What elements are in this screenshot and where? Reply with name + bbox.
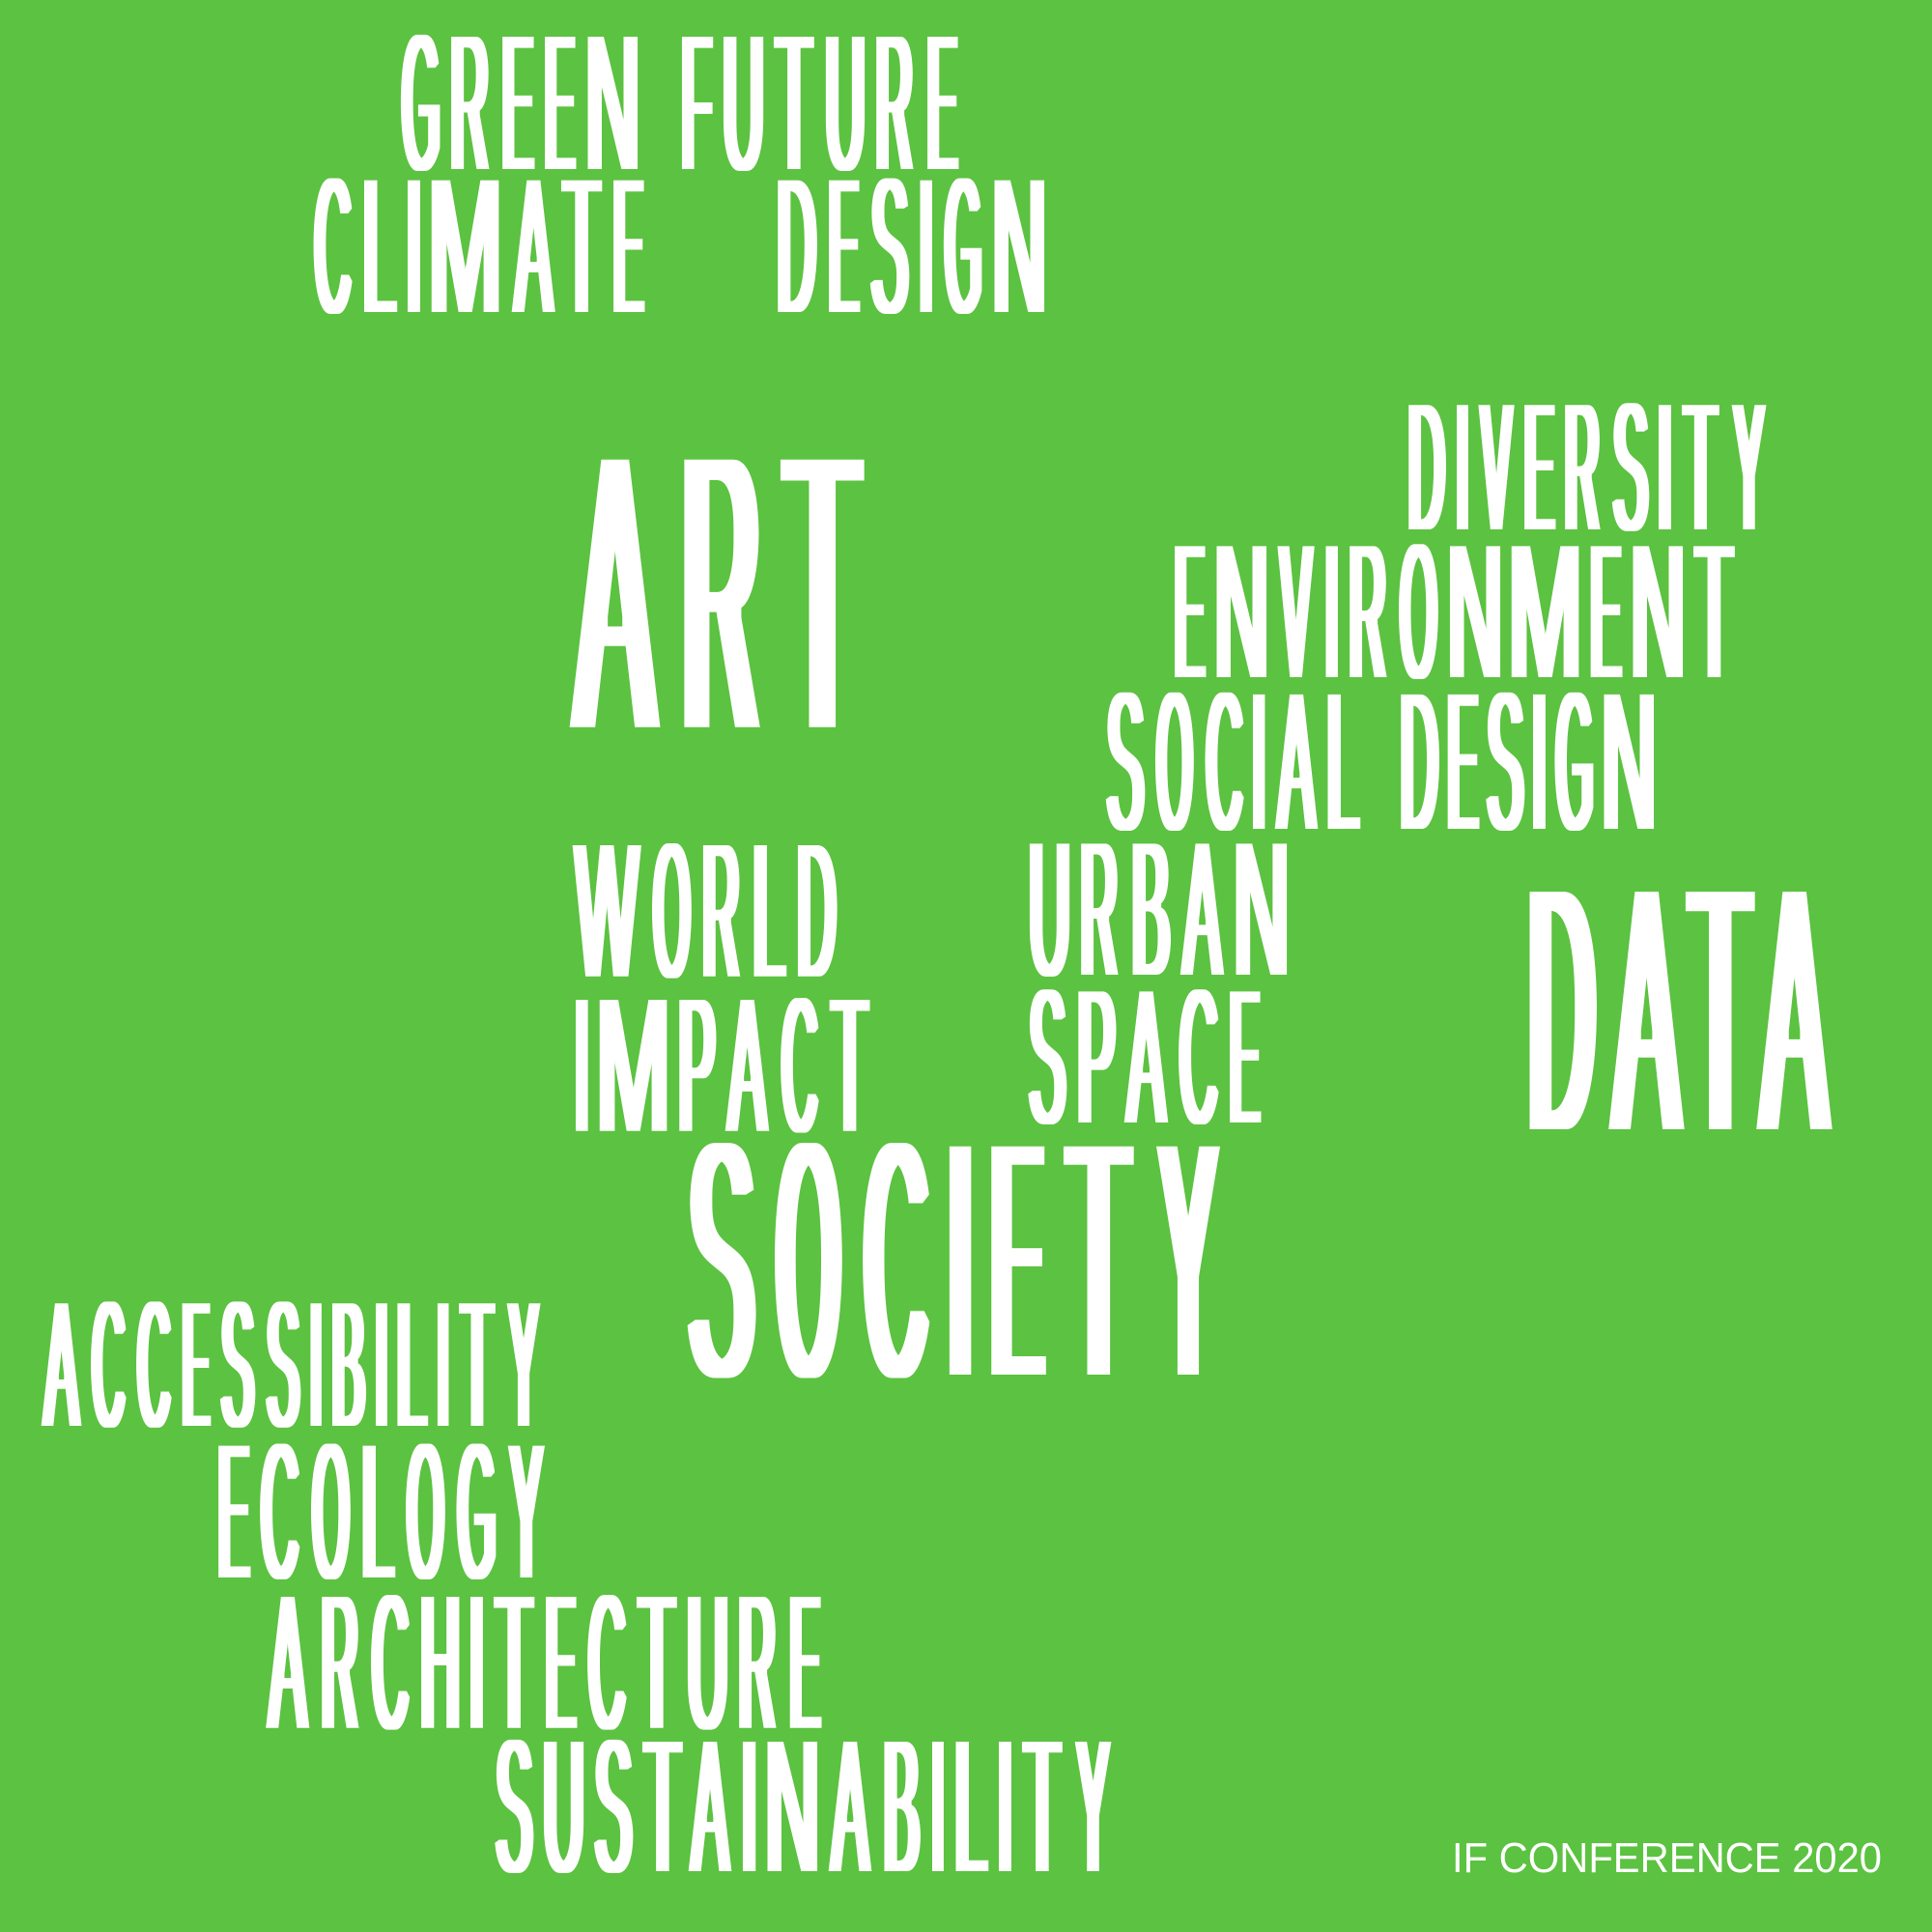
keyword: SUSTAINABILITY: S bbox=[497, 1697, 532, 1915]
keyword: DIVERSITY: T bbox=[1685, 362, 1717, 571]
keyword: WORLD: O bbox=[654, 802, 690, 1021]
keyword: ARCHITECTURE: A bbox=[270, 1553, 306, 1773]
footer label: IF CONFERENCE 2020 bbox=[1452, 1835, 1882, 1882]
keyword: ACCESSIBILITY: S bbox=[221, 1263, 254, 1467]
keyword: DESIGN: S bbox=[871, 136, 908, 356]
keyword: DESIGN: I bbox=[920, 136, 932, 356]
word cloud: small keywords: E bbox=[790, 1553, 819, 1773]
word cloud: small keywords: E bbox=[1230, 948, 1259, 1167]
keyword: CLIMATE: T bbox=[564, 136, 600, 356]
keyword: SOCIETY bbox=[690, 1069, 1216, 1452]
keyword: SPACE: P bbox=[1078, 948, 1116, 1167]
word cloud: small keywords: D bbox=[797, 802, 836, 1021]
text: T bbox=[785, 369, 860, 818]
text: Y bbox=[1160, 1069, 1216, 1452]
keyword: SUSTAINABILITY: N bbox=[765, 1697, 819, 1915]
keyword: ECOLOGY: O bbox=[313, 1402, 349, 1622]
word cloud: small keywords: N bbox=[1234, 800, 1290, 1019]
keyword: ACCESSIBILITY: C bbox=[93, 1263, 125, 1467]
keyword: URBAN: B bbox=[1132, 800, 1170, 1019]
keyword: SUSTAINABILITY: B bbox=[884, 1697, 920, 1915]
keyword: ENVIRONMENT: E bbox=[1591, 502, 1621, 722]
keyword: ENVIRONMENT: N bbox=[1631, 502, 1685, 722]
keyword: DESIGN: G bbox=[945, 136, 981, 356]
keyword: ACCESSIBILITY: I bbox=[376, 1263, 387, 1467]
keyword: SUSTAINABILITY: A bbox=[692, 1697, 728, 1915]
keyword: ACCESSIBILITY: I bbox=[311, 1263, 321, 1467]
word cloud: small keywords: N bbox=[992, 136, 1046, 356]
keyword: SUSTAINABILITY: I bbox=[742, 1697, 757, 1915]
keyword: SOCIETY: T bbox=[1068, 1069, 1129, 1452]
keyword: DESIGN (social): S bbox=[1488, 650, 1523, 874]
keyword: SPACE: C bbox=[1179, 948, 1217, 1167]
keyword: DESIGN: E bbox=[829, 136, 858, 356]
text: Y bbox=[1734, 362, 1764, 571]
word cloud: small keywords: Y bbox=[509, 1263, 538, 1467]
keyword: ECOLOGY: C bbox=[261, 1402, 298, 1622]
keyword: SUSTAINABILITY: L bbox=[955, 1697, 986, 1915]
keyword: ACCESSIBILITY: I bbox=[438, 1263, 448, 1467]
keyword: SUSTAINABILITY: T bbox=[1025, 1697, 1060, 1915]
keyword: ENVIRONMENT: O bbox=[1401, 502, 1436, 722]
keyword: ENVIRONMENT: V bbox=[1281, 502, 1311, 722]
keyword: DESIGN (social): D bbox=[1401, 650, 1438, 874]
keyword: DIVERSITY: I bbox=[1658, 362, 1672, 571]
keyword: ART: A bbox=[576, 369, 654, 818]
keyword: ENVIRONMENT: I bbox=[1325, 502, 1338, 722]
keyword: CLIMATE: M bbox=[428, 136, 502, 356]
keyword: SUSTAINABILITY: S bbox=[595, 1697, 632, 1915]
keyword: IMPACT: M bbox=[596, 956, 670, 1176]
keyword: ACCESSIBILITY: E bbox=[183, 1263, 209, 1467]
keyword: ARCHITECTURE: U bbox=[687, 1553, 728, 1773]
word cloud: small keywords: N bbox=[1602, 650, 1656, 874]
keyword: WORLD: R bbox=[703, 802, 739, 1021]
keyword: ACCESSIBILITY: A bbox=[44, 1263, 78, 1467]
keyword: DATA: D bbox=[1529, 811, 1594, 1209]
keyword: CLIMATE: C bbox=[315, 136, 351, 356]
keyword: IMPACT: A bbox=[728, 956, 766, 1176]
word cloud: small keywords: T bbox=[1696, 502, 1732, 722]
keyword: SOCIETY: O bbox=[778, 1069, 839, 1452]
keyword: ENVIRONMENT: R bbox=[1350, 502, 1386, 722]
keyword: SUSTAINABILITY: T bbox=[645, 1697, 680, 1915]
word cloud: small keywords: Y bbox=[510, 1402, 543, 1622]
keyword: SOCIETY: C bbox=[866, 1069, 927, 1452]
keyword: ARCHITECTURE: T bbox=[639, 1553, 674, 1773]
keyword: SUSTAINABILITY: I bbox=[998, 1697, 1012, 1915]
keyword: URBAN: A bbox=[1183, 800, 1221, 1019]
keyword: SOCIAL: O bbox=[1157, 650, 1192, 874]
keyword: SUSTAINABILITY: U bbox=[543, 1697, 584, 1915]
keyword: ENVIRONMENT: N bbox=[1214, 502, 1268, 722]
keyword: SPACE: S bbox=[1030, 948, 1065, 1167]
keyword: DIVERSITY: V bbox=[1482, 362, 1511, 571]
keyword: DIVERSITY: E bbox=[1524, 362, 1553, 571]
keyword: WORLD: L bbox=[753, 802, 784, 1021]
keyword: DIVERSITY: S bbox=[1613, 362, 1648, 571]
word cloud: small keywords: T bbox=[832, 956, 867, 1176]
keyword: URBAN: U bbox=[1029, 800, 1070, 1019]
word cloud: small keywords: L bbox=[1327, 650, 1358, 874]
keyword: DIVERSITY: D bbox=[1408, 362, 1445, 571]
keyword: SOCIETY: S bbox=[690, 1069, 753, 1452]
keyword: CLIMATE: L bbox=[363, 136, 395, 356]
keyword: SOCIAL: S bbox=[1107, 650, 1144, 874]
keyword: CLIMATE: I bbox=[407, 136, 421, 356]
keyword: ARCHITECTURE: R bbox=[322, 1553, 358, 1773]
keyword: ACCESSIBILITY: B bbox=[332, 1263, 365, 1467]
keyword: DESIGN (social): G bbox=[1556, 650, 1593, 874]
keyword: SOCIAL: C bbox=[1207, 650, 1242, 874]
keyword: ART: R bbox=[684, 369, 759, 818]
keyword: SPACE: A bbox=[1127, 948, 1165, 1167]
keyword: SUSTAINABILITY: I bbox=[932, 1697, 944, 1915]
keyword: ENVIRONMENT: N bbox=[1447, 502, 1503, 722]
keyword: IMPACT: C bbox=[782, 956, 817, 1176]
keyword: ACCESSIBILITY: L bbox=[397, 1263, 426, 1467]
keyword: SOCIETY: E bbox=[992, 1069, 1042, 1452]
keyword: ARCHITECTURE: R bbox=[739, 1553, 776, 1773]
keyword: ECOLOGY: O bbox=[408, 1402, 443, 1622]
keyword: SUSTAINABILITY: A bbox=[832, 1697, 868, 1915]
keyword: DATA: A bbox=[1614, 811, 1679, 1209]
keyword: ARCHITECTURE: C bbox=[588, 1553, 625, 1773]
keyword: ARCHITECTURE: I bbox=[469, 1553, 484, 1773]
keyword: IMPACT: P bbox=[679, 956, 715, 1176]
keyword: DATA: T bbox=[1690, 811, 1750, 1209]
keyword: URBAN: R bbox=[1081, 800, 1118, 1019]
keyword: ACCESSIBILITY: S bbox=[267, 1263, 299, 1467]
keyword: ACCESSIBILITY: T bbox=[462, 1263, 493, 1467]
keyword: ACCESSIBILITY: C bbox=[138, 1263, 170, 1467]
keyword: DESIGN: D bbox=[778, 136, 816, 356]
keyword: SOCIAL: I bbox=[1253, 650, 1265, 874]
keyword: ARCHITECTURE: T bbox=[497, 1553, 532, 1773]
keyword: ENVIRONMENT: M bbox=[1508, 502, 1582, 722]
keyword: ECOLOGY: L bbox=[362, 1402, 393, 1622]
keyword: ECOLOGY: G bbox=[458, 1402, 496, 1622]
keyword: ARCHITECTURE: E bbox=[546, 1553, 575, 1773]
keyword: DIVERSITY: R bbox=[1565, 362, 1600, 571]
keyword: CLIMATE: A bbox=[515, 136, 552, 356]
keyword: IMPACT: I bbox=[575, 956, 588, 1176]
keyword: WORLD: W bbox=[576, 802, 639, 1021]
word cloud: small keywords: E bbox=[613, 136, 642, 356]
keyword: ARCHITECTURE: C bbox=[372, 1553, 409, 1773]
keyword: SOCIAL: A bbox=[1278, 650, 1315, 874]
word cloud: small keywords: Y bbox=[1077, 1697, 1109, 1915]
keyword: DESIGN (social): E bbox=[1448, 650, 1478, 874]
keyword: DIVERSITY: I bbox=[1457, 362, 1468, 571]
keyword: SOCIETY: I bbox=[949, 1069, 973, 1452]
keyword: ENVIRONMENT: E bbox=[1175, 502, 1204, 722]
keyword: ECOLOGY: E bbox=[218, 1402, 249, 1622]
keyword: DESIGN (social): I bbox=[1532, 650, 1547, 874]
keyword: ARCHITECTURE: H bbox=[421, 1553, 460, 1773]
